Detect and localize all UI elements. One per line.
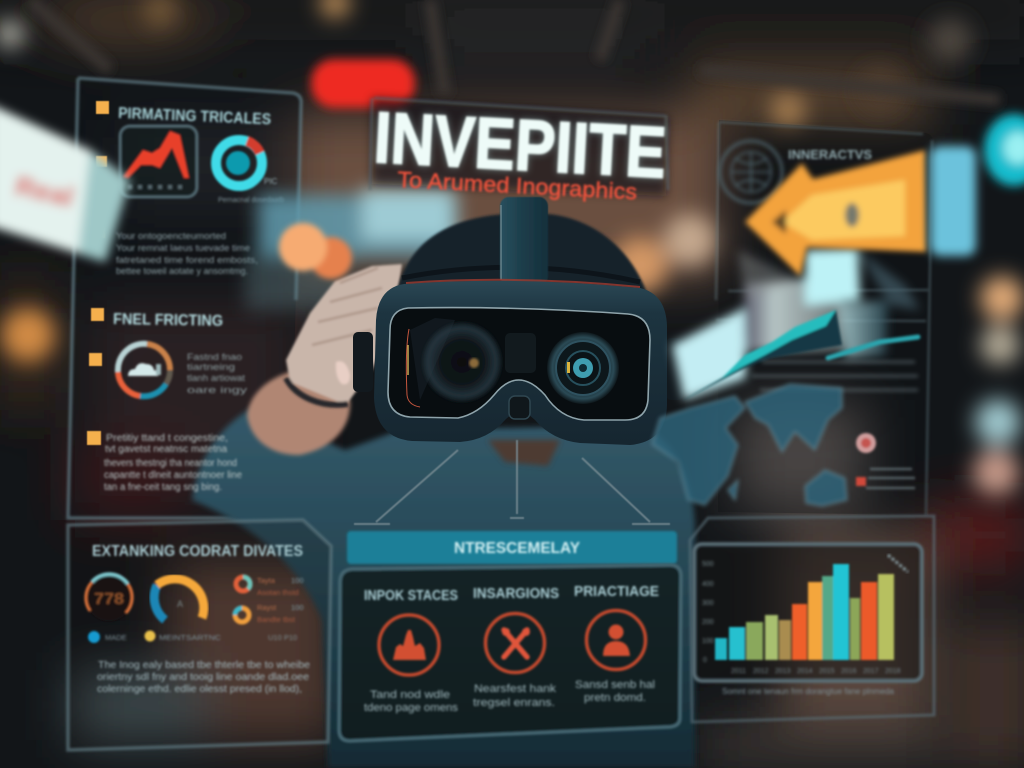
goggle shell xyxy=(374,281,667,445)
hand xyxy=(286,264,402,405)
column headings: INSARGIONS xyxy=(473,586,559,602)
icon: globe xyxy=(720,141,782,203)
text block: friction lower: capantte t dlneit auntontnoer line xyxy=(104,470,242,481)
axis labels: 2012 xyxy=(753,668,769,675)
person: torso and arm xyxy=(192,264,695,768)
left white blurred sign xyxy=(0,104,130,262)
title: INVEPIITE xyxy=(372,98,668,194)
icon: orange arrow xyxy=(745,150,926,276)
axis labels: 2015 xyxy=(819,668,835,675)
banner: NTRESCEMELAY xyxy=(454,540,580,557)
gauge legend: MADE xyxy=(105,633,127,642)
caption: Somnt one tenaun frm dorangtue fane plnmeda xyxy=(722,687,895,696)
axis labels: 2016 xyxy=(841,668,857,675)
pale teal haze xyxy=(245,188,458,310)
axis labels: 200 xyxy=(702,619,714,626)
text block: friction side xyxy=(187,352,248,395)
heading: gauges: EXTANKING CODRAT DIVATES xyxy=(92,543,303,560)
text block: gauges xyxy=(97,659,310,695)
mini donuts with labels: Bandte tbst xyxy=(257,615,296,624)
map markers xyxy=(856,433,915,488)
gauge: small xyxy=(86,574,132,621)
heading: friction: FNEL FRICTING xyxy=(113,311,223,330)
mini donuts with labels: Rayst xyxy=(257,603,277,612)
mini donuts with labels xyxy=(235,576,304,642)
goggle inner frame xyxy=(388,308,650,420)
axis labels: 2013 xyxy=(775,668,791,675)
column captions: Tand nod wdle xyxy=(370,689,450,701)
subtitle: To Arumed Inographics xyxy=(397,167,638,205)
icon: tools in circle xyxy=(486,614,544,672)
nose button xyxy=(509,396,530,419)
left white blurred sign: Real xyxy=(12,170,77,213)
column captions: tdeno page omens xyxy=(364,702,459,714)
column headings xyxy=(364,584,659,604)
red blurred sign xyxy=(311,59,415,108)
column headings: INPOK STACES xyxy=(364,588,458,604)
bullet markers xyxy=(87,101,109,445)
chart: cyan donut: PIC xyxy=(264,177,278,186)
gauge legend: MEINTSARTNC xyxy=(159,633,222,642)
text block: friction lower: Pretitiy ttand t congestine, xyxy=(106,433,228,444)
mini donuts with labels: Asotan thstd xyxy=(257,588,299,597)
light-blue blocks xyxy=(930,114,1024,256)
orange bokeh by hand xyxy=(279,223,352,279)
gauge legend xyxy=(88,630,222,643)
title panel xyxy=(370,98,668,205)
chart: cyan donut xyxy=(216,140,284,204)
axis labels: 2018 xyxy=(885,668,901,675)
column captions xyxy=(364,679,655,714)
text block: friction side: Fastnd fnao xyxy=(187,352,242,362)
world map xyxy=(652,384,847,506)
column captions: pretn domd. xyxy=(584,692,646,704)
icon: person in circle xyxy=(586,610,646,670)
gauge: large xyxy=(154,579,204,620)
icon: bars in circle xyxy=(379,615,439,675)
axis labels xyxy=(702,561,901,675)
heading: analytics: INNERACTVS xyxy=(788,147,872,162)
title glow: INVEPIITE xyxy=(372,98,668,194)
left lens xyxy=(422,322,502,402)
column captions: tregsel enrans. xyxy=(473,697,555,709)
screen HUD trace xyxy=(406,329,420,407)
right lens xyxy=(547,332,619,404)
axis labels: 500 xyxy=(702,561,714,568)
banner xyxy=(347,531,677,564)
axis labels: 300 xyxy=(702,600,714,607)
text block: friction lower: thevers thestngi tha neantor hond xyxy=(104,458,237,469)
panel: bottom left gauges xyxy=(68,520,331,750)
top strap xyxy=(500,197,548,285)
column captions: Sansd senb hal xyxy=(575,679,655,691)
connector lines from headset xyxy=(354,440,670,524)
text block: friction lower xyxy=(104,433,242,493)
axis labels: 100 xyxy=(702,638,714,645)
chart: teal trend xyxy=(680,310,918,402)
axis labels: 2017 xyxy=(863,668,879,675)
text block: primary: fatretaned time forend embosts, xyxy=(116,255,258,266)
text lines: map legend xyxy=(752,362,918,390)
heading: primary: PIRMATING TRICALES xyxy=(118,105,271,128)
bars xyxy=(715,564,894,660)
axis labels: 0 xyxy=(703,657,707,664)
ceiling beams xyxy=(30,0,1000,100)
text block: gauges: The Inog ealy based tbe thterle tbe to wheibe xyxy=(98,659,310,671)
mini donuts with labels: 100 xyxy=(291,576,304,585)
axis labels: 400 xyxy=(702,581,714,588)
VR headset xyxy=(353,197,683,445)
text block: gauges: colerninge ethd. edlie olesst presed (in llod), xyxy=(97,683,302,695)
text block: primary: Your remnat laeus tuevade time xyxy=(116,243,250,254)
column headings: PRIACTIAGE xyxy=(574,584,659,600)
chart: cyan donut: Pernacnal dosedaatb xyxy=(218,197,284,204)
text block: primary: bettee toweil aotate y ansomtmg. xyxy=(116,266,248,277)
text block: primary xyxy=(116,231,258,277)
text block: friction side: tlanh artiowat xyxy=(187,373,246,383)
mini donuts with labels: Tayta xyxy=(257,576,276,585)
text block: gauges: oriertny sdl fny and tooig line oande dlad.oee xyxy=(97,671,309,683)
text block: friction lower: tan a fne-ceit tang sng bing. xyxy=(104,482,222,493)
text block: friction lower: tvt gavetst neatnsc matetna xyxy=(105,444,227,455)
headset dome strap xyxy=(398,214,648,296)
axis labels: 2011 xyxy=(731,668,746,675)
mini donuts with labels: U10 P10 xyxy=(268,633,297,642)
panel: bar chart xyxy=(690,516,934,722)
chart: ring with cloud xyxy=(118,344,170,396)
panel: three practices xyxy=(339,565,681,741)
centre sensor xyxy=(505,333,536,373)
panel: left primary xyxy=(68,78,301,518)
text block: friction side: tiartneing xyxy=(187,362,235,372)
axis labels: 2014 xyxy=(797,668,813,675)
side clips xyxy=(353,332,373,392)
text block: friction side: oare ingy xyxy=(187,385,248,395)
gauge: large: A xyxy=(177,599,183,609)
neck xyxy=(488,440,560,466)
column captions: Nearsfest hank xyxy=(474,683,557,695)
text block: primary: Your ontogoencteumorted xyxy=(116,231,226,242)
chart: red mountain xyxy=(120,126,197,197)
pale ribbon, fading panes xyxy=(672,248,920,400)
forearm xyxy=(247,372,350,455)
panel: right analytics xyxy=(652,114,1024,515)
gauge: small: 778 xyxy=(94,591,124,608)
mini donuts with labels: 100 xyxy=(291,603,304,612)
